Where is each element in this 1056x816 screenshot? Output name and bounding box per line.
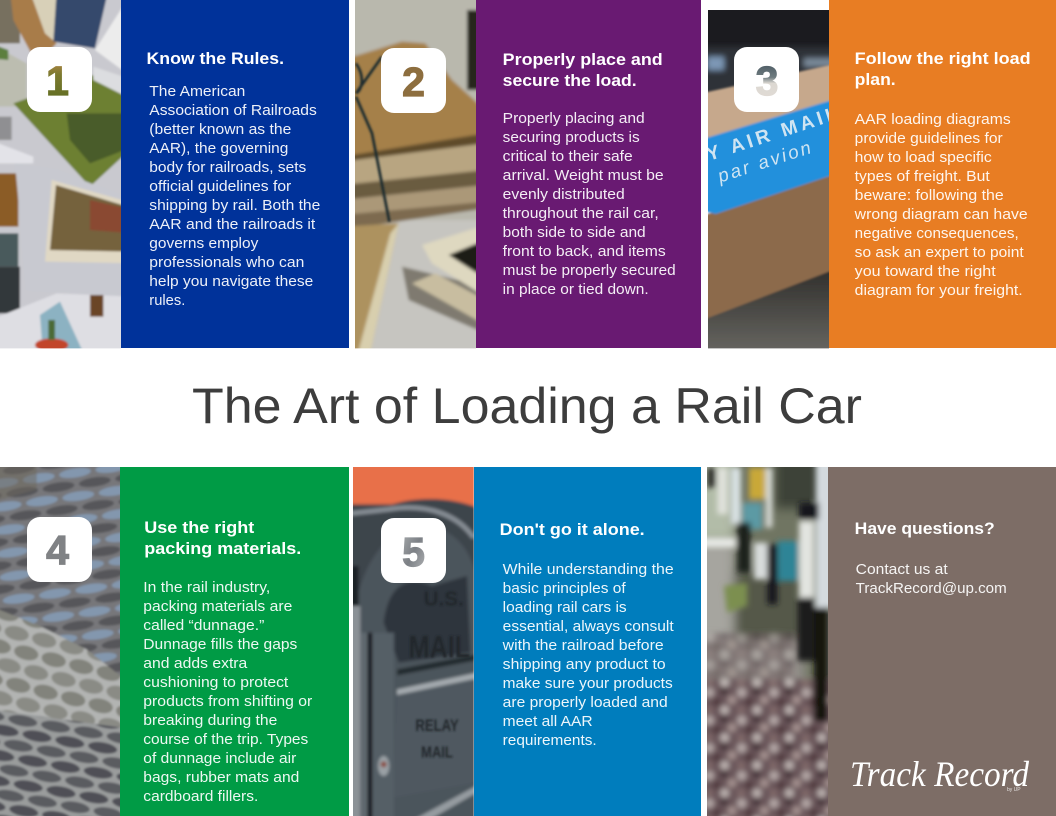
body text: course of the trip. Types: [143, 732, 308, 748]
body text: so ask an expert to point: [855, 245, 1024, 261]
body text: (better known as the: [149, 122, 291, 138]
mailbox lettering: MAIL: [408, 630, 470, 665]
body text: breaking during the: [143, 713, 277, 729]
body text: [143, 580, 312, 805]
body text: The American: [149, 84, 245, 100]
body text: AAR), the governing: [149, 141, 288, 157]
heading: [855, 49, 1031, 89]
body text: and adds extra: [143, 656, 248, 672]
body text: diagram for your freight.: [855, 283, 1023, 299]
body text: Dunnage fills the gaps: [143, 637, 297, 653]
number badge 2: 2: [402, 59, 425, 105]
body text: are properly loaded and: [503, 695, 668, 711]
mailbox lettering: RELAY: [415, 716, 459, 735]
body text: bags, rubber mats and: [143, 770, 299, 786]
text panel: [474, 467, 701, 816]
body text: [149, 84, 320, 309]
air mail label: [708, 108, 829, 186]
text panel: [121, 0, 349, 348]
string around papers: [356, 57, 389, 222]
body text: shipping by rail. Both the: [149, 198, 320, 214]
panel: properly place: [342, 0, 701, 360]
body text: Association of Railroads: [149, 103, 317, 119]
body text: with the railroad before: [502, 638, 664, 654]
text panel: [828, 467, 1056, 816]
body text: meet all AAR: [503, 714, 593, 730]
body text: [854, 112, 1028, 299]
number badge 1: 1: [46, 58, 69, 104]
air mail label: Y AIR MAIL: [704, 104, 841, 166]
body text: help you navigate these: [149, 274, 313, 290]
heading: Properly place and: [503, 50, 663, 69]
body text: governs employ: [149, 236, 259, 252]
logo: Track Record: Track Record: [850, 754, 1030, 794]
mailbox lettering: MAIL: [421, 745, 453, 762]
body text: must be properly secured: [503, 263, 676, 279]
body text: loading rail cars is: [503, 600, 627, 616]
panel: packing materials: [0, 456, 349, 816]
logo: Track Record: by UP: [1007, 787, 1021, 793]
body text: wrong diagram can have: [854, 207, 1028, 223]
heading: Follow the right load: [855, 49, 1031, 68]
photo: old papers: [355, 0, 476, 348]
mailbox lettering: [408, 587, 470, 762]
body text: While understanding the: [503, 562, 674, 578]
photo: row of mailboxes: [707, 467, 828, 816]
body text: throughout the rail car,: [503, 206, 659, 222]
contact text: [856, 562, 1007, 597]
text panel: [120, 467, 349, 816]
number badge 3: 3: [756, 58, 778, 104]
body text: official guidelines for: [149, 179, 291, 195]
heading: [503, 50, 663, 90]
body text: evenly distributed: [503, 187, 625, 203]
title: The Art of Loading a Rail Car: [192, 378, 862, 434]
body text: [502, 562, 674, 749]
heading: plan.: [855, 70, 896, 89]
body text: essential, always consult: [503, 619, 674, 635]
body text: make sure your products: [503, 676, 673, 692]
number badge 4: [27, 517, 92, 582]
body text: you toward the right: [855, 264, 996, 280]
body text: Properly placing and: [503, 111, 645, 127]
heading: Use the right: [144, 518, 255, 537]
body text: In the rail industry,: [143, 580, 270, 596]
heading: packing materials.: [144, 539, 301, 558]
number badge 5: 5: [402, 529, 425, 575]
body text: types of freight. But: [855, 169, 990, 185]
photo: bubble wrap: [0, 467, 120, 816]
body text: provide guidelines for: [855, 131, 1003, 147]
number badge 5: [381, 518, 446, 583]
body text: called “dunnage.”: [143, 618, 264, 634]
body text: body for railroads, sets: [149, 160, 306, 176]
number badge 2: [381, 48, 446, 113]
panel: don't go it alone: [342, 456, 701, 816]
body text: products from shifting or: [143, 694, 312, 710]
number badge 1: [27, 47, 92, 112]
heading: [144, 518, 301, 558]
text panel: [829, 0, 1056, 348]
body text: cushioning to protect: [143, 675, 288, 691]
body text: rules.: [149, 293, 185, 309]
photo: stamps: [0, 0, 121, 348]
body text: arrival. Weight must be: [503, 168, 664, 184]
heading: Know the Rules.: [146, 49, 284, 68]
body text: negative consequences,: [855, 226, 1019, 242]
contact text: TrackRecord@up.com: [856, 581, 1007, 597]
body text: requirements.: [503, 733, 597, 749]
air mail label: par avion: [714, 137, 813, 187]
number badge 3: [734, 47, 799, 112]
body text: cardboard fillers.: [143, 789, 258, 805]
mailbox lettering: U.S.: [424, 587, 464, 610]
heading: Don't go it alone.: [500, 520, 645, 539]
body text: how to load specific: [855, 150, 992, 166]
panel: follow the plan: [694, 0, 1056, 360]
body text: AAR loading diagrams: [855, 112, 1011, 128]
body text: securing products is: [503, 130, 640, 146]
body text: basic principles of: [503, 581, 627, 597]
body text: shipping any product to: [503, 657, 666, 673]
body text: critical to their safe: [503, 149, 633, 165]
contact text: Contact us at: [856, 562, 948, 578]
panel: have questions: [691, 453, 1056, 816]
heading: secure the load.: [503, 71, 637, 90]
body text: AAR and the railroads it: [149, 217, 315, 233]
body text: front to back, and items: [503, 244, 666, 260]
body text: professionals who can: [149, 255, 304, 271]
photo: mailbox: [353, 467, 474, 816]
body text: both side to side and: [503, 225, 646, 241]
number badge 4: 4: [46, 527, 69, 573]
photo: air mail tube: [708, 10, 829, 348]
text panel: [476, 0, 701, 348]
heading: Have questions?: [855, 519, 995, 538]
body text: beware: following the: [855, 188, 1004, 204]
body text: in place or tied down.: [503, 282, 649, 298]
panel: know the rules: [0, 0, 349, 360]
body text: packing materials are: [143, 599, 292, 615]
body text: [503, 111, 676, 298]
body text: of dunnage include air: [143, 751, 296, 767]
